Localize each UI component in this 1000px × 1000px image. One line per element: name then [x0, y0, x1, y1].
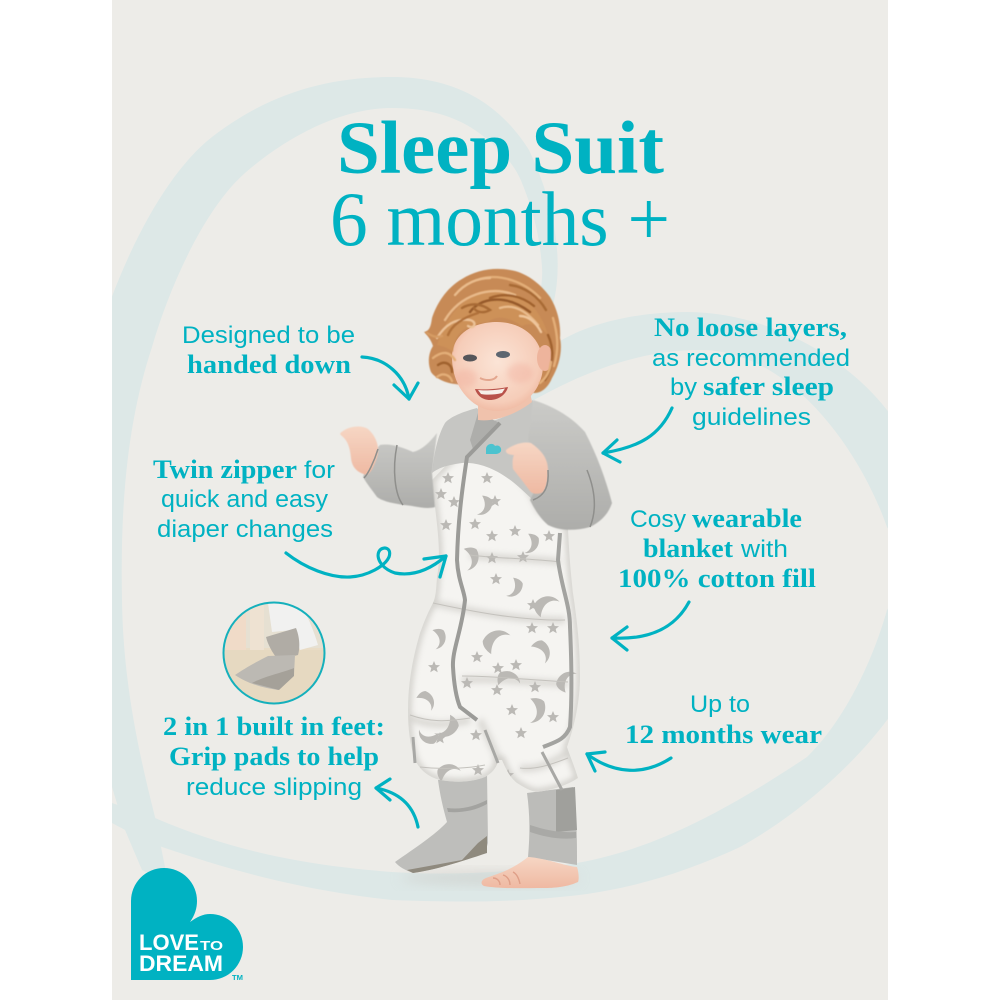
callout: wearable blanket [618, 504, 816, 593]
logo: Love to Dream: TO [200, 938, 223, 953]
inner collar [470, 413, 500, 452]
callout: no loose layers [652, 313, 850, 431]
arrow: wearable blanket [612, 602, 689, 650]
cheeks [455, 363, 533, 387]
child photo illustration [340, 269, 612, 888]
callout: twin zipper: diaper changes [157, 516, 333, 543]
callout: wearable blanket: 100% cotton fill [618, 564, 816, 593]
arrow: 12 months wear [587, 752, 671, 771]
callout: handed down: handed down [187, 350, 352, 379]
chest logo tag [486, 444, 501, 454]
left leg with sock foot [395, 772, 488, 873]
right leg with bare foot [482, 787, 579, 888]
callout: wearable blanket: blanket [643, 534, 733, 563]
cuffs [364, 445, 594, 527]
logo: Love to Dream: TM [232, 975, 243, 982]
panel: beige background [112, 0, 888, 1000]
mouth [475, 387, 508, 400]
callout: 12 months wear [625, 691, 822, 749]
callout: twin zipper [153, 455, 335, 543]
arrow: twin zipper [286, 548, 446, 577]
callout: handed down [182, 322, 355, 379]
callout: built in feet [163, 712, 385, 801]
callout: twin zipper: Twin zipper [153, 455, 297, 484]
callout: wearable blanket: wearable [692, 504, 802, 533]
callout: built in feet: reduce slipping [186, 774, 362, 801]
arrow: built in feet [376, 779, 418, 827]
ear [537, 345, 553, 371]
face [452, 322, 543, 411]
callout: 12 months wear: 12 months wear [625, 720, 822, 749]
eyes [463, 351, 510, 362]
title [330, 107, 670, 262]
callout: no loose layers: by [670, 374, 697, 401]
callout: built in feet: Grip pads to help [169, 742, 379, 771]
logo: Love to Dream: DREAM [139, 951, 223, 976]
grey yoke [432, 400, 545, 500]
moon and star print [415, 472, 581, 782]
callout: twin zipper: quick and easy [161, 486, 328, 513]
hair front [437, 289, 548, 352]
nose [480, 376, 497, 380]
callout: twin zipper: for [304, 457, 335, 484]
sleep suit body [408, 400, 581, 792]
callout: no loose layers: No loose layers, [654, 313, 847, 342]
main zipper [453, 423, 500, 720]
logo: Love to Dream [131, 868, 243, 982]
callout: no loose layers: safer sleep [703, 372, 834, 401]
left hand [340, 427, 378, 475]
arrow: no loose layers [603, 408, 672, 462]
arrow: handed down [362, 357, 418, 399]
title: Sleep Suit [337, 107, 664, 190]
heart outline watermark [100, 77, 895, 902]
right hand [506, 442, 548, 494]
left arm sleeve [363, 433, 437, 508]
callout: wearable blanket: Cosy [630, 506, 686, 533]
hair strands [427, 277, 557, 383]
callout: wearable blanket: with [740, 536, 788, 563]
side zipper [543, 533, 572, 747]
neck [478, 392, 532, 420]
right arm sleeve [528, 400, 612, 530]
callout: no loose layers: as recommended [652, 345, 850, 372]
title: 6 months + [330, 176, 670, 262]
suit puffy shading [408, 430, 580, 792]
callout: handed down: Designed to be [182, 322, 355, 349]
logo: Love to Dream: LOVE [139, 930, 199, 955]
infographic canvas [112, 0, 888, 1000]
callout: no loose layers: guidelines [692, 404, 811, 431]
callout: built in feet: 2 in 1 built in feet: [163, 712, 385, 741]
inset photo: grip feet [224, 602, 324, 705]
floor shadow [400, 871, 580, 885]
leg zippers [413, 730, 562, 790]
callout: 12 months wear: Up to [690, 691, 750, 718]
quilting seams [410, 555, 568, 768]
hair back [424, 269, 561, 393]
